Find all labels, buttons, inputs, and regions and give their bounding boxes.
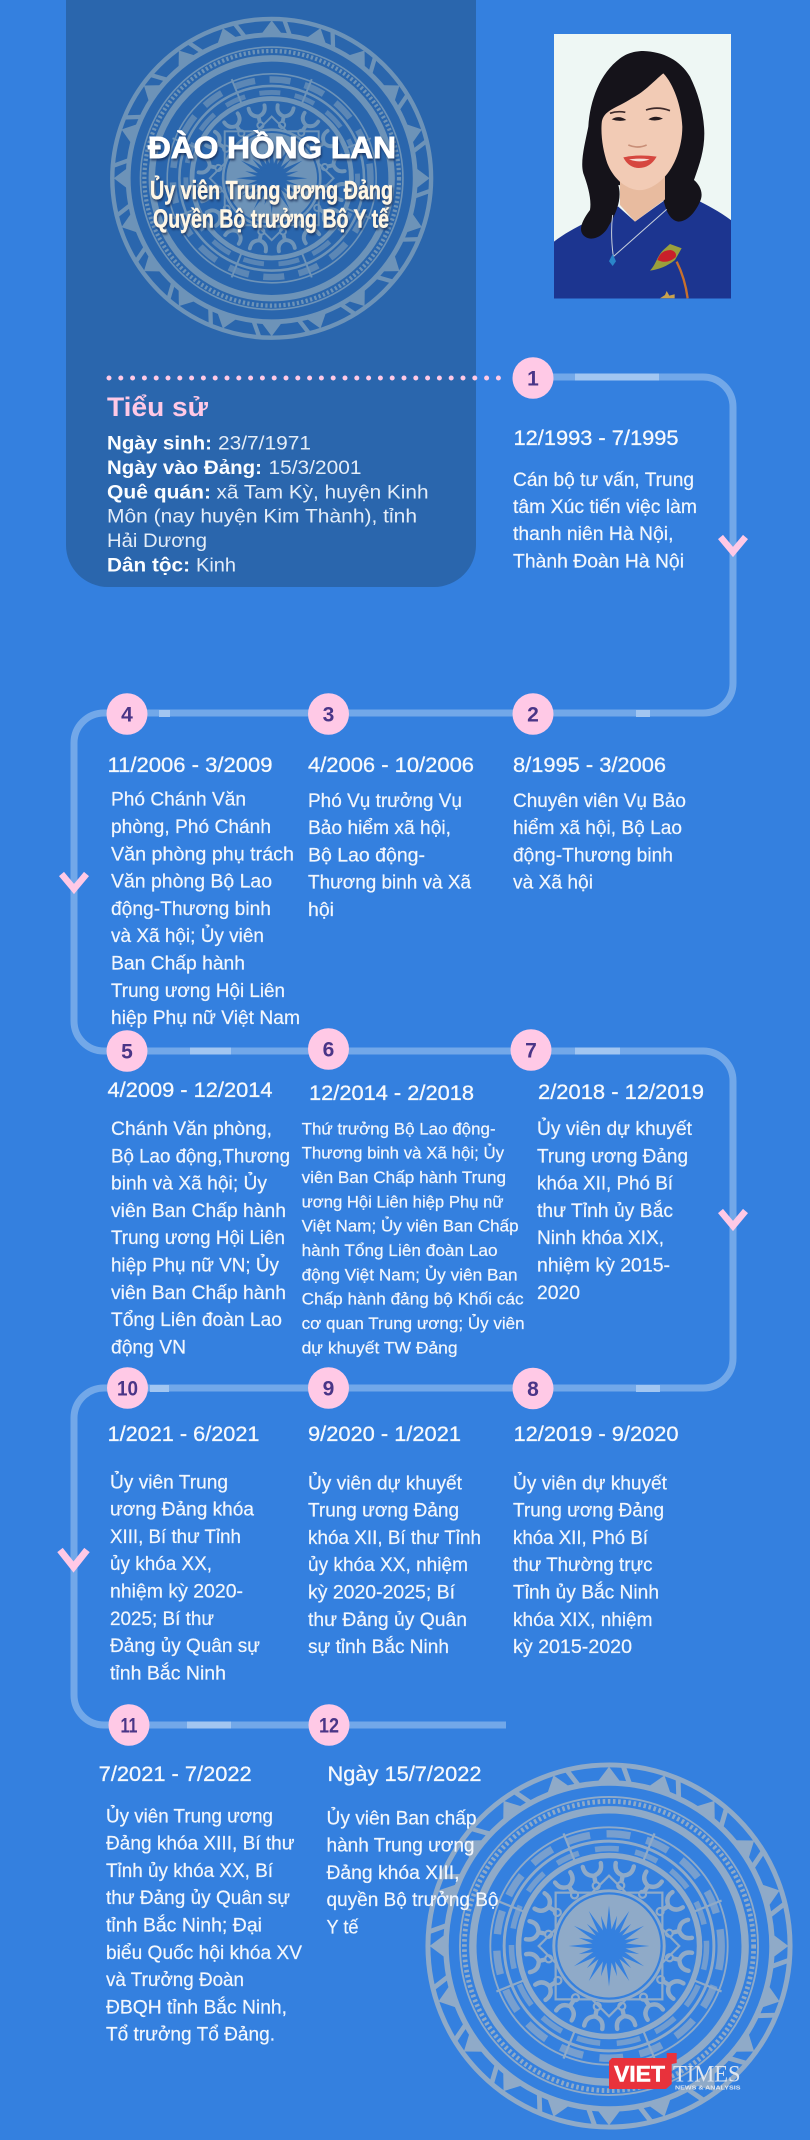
step 4 text: hiệp Phụ nữ Việt Nam bbox=[111, 1007, 300, 1029]
step 10 text: ương Đảng khóa bbox=[110, 1499, 254, 1521]
step 5 text: Tổng Liên đoàn Lao bbox=[111, 1309, 282, 1331]
step 8 text: khóa XII, Phó Bí bbox=[513, 1527, 649, 1549]
flower bbox=[650, 244, 682, 271]
step 3 text: hội bbox=[308, 899, 334, 921]
panel: biography card bbox=[66, 0, 476, 587]
step 3 text: Bộ Lao động- bbox=[308, 844, 425, 866]
heading: Tiểu sử: Tiểu sử bbox=[107, 392, 208, 422]
step 6 text: Thứ trưởng Bộ Lao động- bbox=[302, 1119, 496, 1138]
biography text: 23/7/1971 bbox=[218, 432, 311, 454]
step 2 text bbox=[513, 754, 686, 894]
step 9 text: 9/2020 - 1/2021 bbox=[308, 1423, 461, 1446]
biography text: Kinh bbox=[196, 554, 236, 576]
step 10 text bbox=[108, 1423, 260, 1684]
step 11 text: Ủy viên Trung ương bbox=[106, 1803, 273, 1827]
step 2 marker bbox=[512, 693, 554, 735]
step 4 text: Văn phòng Bộ Lao bbox=[111, 871, 272, 893]
jewellery bbox=[612, 209, 667, 257]
step 8 marker bbox=[512, 1368, 554, 1409]
step 4 text: phòng, Phó Chánh bbox=[111, 816, 271, 838]
step 11 text: 7/2021 - 7/2022 bbox=[99, 1763, 252, 1786]
step 10 text: Đảng ủy Quân sự bbox=[110, 1635, 260, 1657]
step 5 text: viên Ban Chấp hành bbox=[111, 1282, 286, 1304]
step 4 marker: 4 bbox=[121, 704, 133, 726]
step 7 text bbox=[537, 1081, 704, 1304]
step 11 text: tỉnh Bắc Ninh; Đại bbox=[106, 1914, 262, 1936]
step 7 text: Trung ương Đảng bbox=[537, 1145, 688, 1167]
step 10 text: tỉnh Bắc Ninh bbox=[110, 1661, 226, 1684]
step 9 text: sự tỉnh Bắc Ninh bbox=[308, 1635, 449, 1658]
step 3 text bbox=[308, 754, 474, 921]
step 3 marker: 3 bbox=[323, 704, 334, 726]
step 5 text: Chánh Văn phòng, bbox=[111, 1118, 272, 1140]
arrow: chevron left 1 bbox=[62, 874, 86, 889]
step 12 marker: 12 bbox=[319, 1714, 339, 1738]
step 6 text: ương Hội Liên hiệp Phụ nữ bbox=[302, 1192, 504, 1211]
title: ĐÀO HỒNG LAN bbox=[148, 129, 396, 165]
step 8 text bbox=[513, 1423, 678, 1658]
step 5 text: hiệp Phụ nữ VN; Ủy bbox=[111, 1252, 279, 1276]
step 6 text: viên Ban Chấp hành Trung bbox=[302, 1168, 506, 1187]
step 1 text: 12/1993 - 7/1995 bbox=[514, 427, 678, 450]
step 7 text: 2020 bbox=[537, 1282, 580, 1304]
hair bbox=[581, 51, 704, 239]
step 7 marker bbox=[510, 1029, 552, 1071]
step 12 text bbox=[326, 1763, 499, 1938]
eyes and mouth bbox=[612, 117, 663, 121]
biography text: 15/3/2001 bbox=[268, 457, 362, 479]
biography text bbox=[107, 432, 428, 576]
biography text: Quê quán: bbox=[107, 481, 211, 503]
step 1 marker bbox=[512, 357, 554, 399]
step 12 text: Ủy viên Ban chấp bbox=[326, 1805, 477, 1829]
step 2 marker: 2 bbox=[527, 704, 539, 726]
step 10 marker: 10 bbox=[117, 1378, 138, 1400]
logo: VietTimes: TIMES bbox=[673, 2062, 740, 2087]
title bbox=[148, 129, 396, 234]
step 3 text: Phó Vụ trưởng Vụ bbox=[308, 790, 462, 812]
step 1 text: thanh niên Hà Nội, bbox=[513, 523, 674, 545]
title: Quyền Bộ trưởng Bộ Y tế bbox=[153, 204, 389, 234]
step 1 marker: 1 bbox=[527, 368, 539, 390]
step 12 marker bbox=[308, 1704, 350, 1746]
step 5 text: 4/2009 - 12/2014 bbox=[108, 1079, 273, 1102]
step 1 text: tâm Xúc tiến việc làm bbox=[513, 496, 697, 518]
step 10 text: XIII, Bí thư Tỉnh bbox=[110, 1526, 241, 1548]
step 11 marker: 11 bbox=[120, 1714, 138, 1738]
step 5 text: Trung ương Hội Liên bbox=[111, 1227, 285, 1249]
logo: VietTimes: NEWS & ANALYSIS bbox=[675, 2085, 741, 2091]
step 8 marker: 8 bbox=[527, 1378, 539, 1401]
step 4 text: Trung ương Hội Liên bbox=[111, 980, 285, 1002]
step 5 text: động VN bbox=[111, 1336, 186, 1358]
step 2 text: động-Thương binh bbox=[513, 844, 673, 866]
step 6 text bbox=[302, 1082, 525, 1357]
step 7 text: Ủy viên dự khuyết bbox=[537, 1116, 693, 1140]
step 9 text: Trung ương Đảng bbox=[308, 1500, 459, 1522]
step 3 text: Bảo hiểm xã hội, bbox=[308, 817, 451, 839]
step 10 marker bbox=[107, 1367, 148, 1409]
step 6 text: cơ quan Trung ương; Ủy viên bbox=[302, 1314, 525, 1333]
step 9 text: khóa XII, Bí thư Tỉnh bbox=[308, 1527, 481, 1549]
step 12 text: Y tế bbox=[326, 1916, 359, 1938]
step 9 text: kỳ 2020-2025; Bí bbox=[308, 1582, 456, 1604]
biography text: Ngày vào Đảng: bbox=[107, 457, 262, 479]
arrow: chevron right 2 bbox=[720, 1211, 746, 1226]
step 9 text bbox=[308, 1423, 481, 1658]
step 5 marker bbox=[106, 1030, 148, 1072]
step 10 text: 2025; Bí thư bbox=[110, 1608, 214, 1630]
step 7 marker: 7 bbox=[525, 1040, 537, 1062]
step 6 marker: 6 bbox=[323, 1038, 334, 1062]
biography text: Ngày sinh: bbox=[107, 432, 212, 454]
step 11 marker bbox=[108, 1704, 150, 1746]
step 8 text: kỳ 2015-2020 bbox=[513, 1636, 632, 1658]
step 12 text: Ngày 15/7/2022 bbox=[328, 1763, 482, 1786]
icon: bronze drum emblem top bbox=[112, 19, 431, 338]
step 2 text: và Xã hội bbox=[513, 872, 593, 894]
step 8 text: khóa XIX, nhiệm bbox=[513, 1609, 652, 1631]
step 6 text: 12/2014 - 2/2018 bbox=[309, 1082, 474, 1105]
title: Ủy viên Trung ương Đảng bbox=[150, 174, 393, 205]
step 11 text bbox=[99, 1763, 302, 2046]
step 8 text: Tỉnh ủy Bắc Ninh bbox=[513, 1580, 659, 1604]
step 5 marker: 5 bbox=[121, 1040, 133, 1064]
step 4 text: Văn phòng phụ trách bbox=[111, 843, 294, 865]
step 4 text: động-Thương binh bbox=[111, 898, 271, 920]
step 12 text: quyền Bộ trưởng Bộ bbox=[326, 1889, 499, 1911]
step 1 text: Cán bộ tư vấn, Trung bbox=[513, 469, 694, 491]
step 10 text: nhiệm kỳ 2020- bbox=[110, 1580, 243, 1602]
step 6 text: hành Tổng Liên đoàn Lao bbox=[302, 1241, 498, 1260]
logo: VietTimes bbox=[609, 2053, 741, 2091]
step 11 text: Tổ trưởng Tổ Đảng. bbox=[106, 2024, 275, 2046]
biography text: xã Tam Kỳ, huyện Kinh bbox=[216, 481, 428, 503]
step 6 text: Thương binh và Xã hội; Ủy bbox=[302, 1144, 505, 1163]
step 10 text: Ủy viên Trung bbox=[110, 1469, 228, 1493]
step 7 text: nhiệm kỳ 2015- bbox=[537, 1254, 670, 1276]
step 8 text: Trung ương Đảng bbox=[513, 1500, 664, 1522]
step 2 text: hiểm xã hội, Bộ Lao bbox=[513, 817, 682, 839]
portrait photo bbox=[554, 34, 732, 300]
step 6 marker bbox=[308, 1028, 349, 1070]
arrow: chevron left 2 bbox=[60, 1550, 87, 1567]
step 9 text: Ủy viên dự khuyết bbox=[308, 1470, 463, 1494]
step 7 text: 2/2018 - 12/2019 bbox=[538, 1081, 704, 1104]
icon: bronze drum emblem bottom bbox=[428, 1765, 790, 2127]
step 6 text: Việt Nam; Ủy viên Ban Chấp bbox=[302, 1217, 519, 1236]
step 4 text: 11/2006 - 3/2009 bbox=[108, 754, 272, 777]
step 1 text: Thành Đoàn Hà Nội bbox=[513, 550, 684, 572]
step 4 text: và Xã hội; Ủy viên bbox=[111, 923, 264, 947]
step 11 text: biểu Quốc hội khóa XV bbox=[106, 1942, 302, 1964]
step 11 text: thư Đảng ủy Quân sự bbox=[106, 1887, 290, 1909]
step 9 text: ủy khóa XX, nhiệm bbox=[308, 1554, 468, 1576]
step 5 text bbox=[108, 1079, 290, 1358]
step 7 text: Ninh khóa XIX, bbox=[537, 1227, 664, 1249]
step 11 text: Đảng khóa XIII, Bí thư bbox=[106, 1833, 294, 1855]
step 2 text: 8/1995 - 3/2006 bbox=[513, 754, 666, 777]
step 2 text: Chuyên viên Vụ Bảo bbox=[513, 790, 686, 812]
step 6 text: động Việt Nam; Ủy viên Ban bbox=[302, 1265, 518, 1284]
step 5 text: Bộ Lao động,Thương bbox=[111, 1145, 290, 1167]
step 5 text: binh và Xã hội; Ủy bbox=[111, 1171, 267, 1195]
step 7 text: thư Tỉnh ủy Bắc bbox=[537, 1199, 673, 1222]
step 9 text: thư Đảng ủy Quân bbox=[308, 1609, 467, 1631]
dotted connector bbox=[109, 376, 510, 380]
step 4 marker bbox=[106, 693, 148, 735]
step 9 marker: 9 bbox=[323, 1378, 334, 1400]
step 5 text: viên Ban Chấp hành bbox=[111, 1200, 286, 1222]
step 7 text: khóa XII, Phó Bí bbox=[537, 1173, 674, 1195]
step 3 text: 4/2006 - 10/2006 bbox=[308, 754, 474, 777]
step 11 text: và Trưởng Đoàn bbox=[106, 1969, 244, 1991]
step 4 text: Phó Chánh Văn bbox=[111, 789, 246, 811]
step 4 text: Ban Chấp hành bbox=[111, 952, 245, 974]
step 9 marker bbox=[308, 1367, 349, 1409]
step 10 text: 1/2021 - 6/2021 bbox=[108, 1423, 260, 1446]
step 4 text bbox=[108, 754, 300, 1029]
arrow: chevron right 1 bbox=[720, 537, 746, 552]
dress bbox=[554, 200, 732, 300]
step 8 text: Ủy viên dự khuyết bbox=[513, 1470, 668, 1494]
face bbox=[601, 73, 682, 190]
step 11 text: ĐBQH tỉnh Bắc Ninh, bbox=[106, 1995, 287, 2018]
step 11 text: Tỉnh ủy khóa XX, Bí bbox=[106, 1860, 274, 1882]
step 6 text: Chấp hành đảng bộ Khối các bbox=[302, 1290, 524, 1309]
step 3 text: Thương binh và Xã bbox=[308, 872, 471, 894]
biography text: Hải Dương bbox=[107, 530, 207, 552]
step 3 marker bbox=[308, 693, 349, 735]
step 8 text: 12/2019 - 9/2020 bbox=[514, 1423, 678, 1446]
logo: VietTimes: VIET bbox=[614, 2062, 666, 2087]
step 1 text bbox=[513, 427, 697, 572]
biography text: Dân tộc: bbox=[107, 554, 190, 576]
step 8 text: thư Thường trực bbox=[513, 1554, 653, 1576]
step 10 text: ủy khóa XX, bbox=[110, 1553, 212, 1575]
timeline path bbox=[74, 374, 733, 1728]
step 6 text: dự khuyết TW Đảng bbox=[302, 1338, 458, 1357]
step 12 text: hành Trung ương bbox=[326, 1835, 474, 1857]
step 12 text: Đảng khóa XIII, bbox=[326, 1862, 460, 1884]
neck bbox=[620, 177, 665, 222]
biography text: Môn (nay huyện Kim Thành), tỉnh bbox=[107, 506, 417, 528]
